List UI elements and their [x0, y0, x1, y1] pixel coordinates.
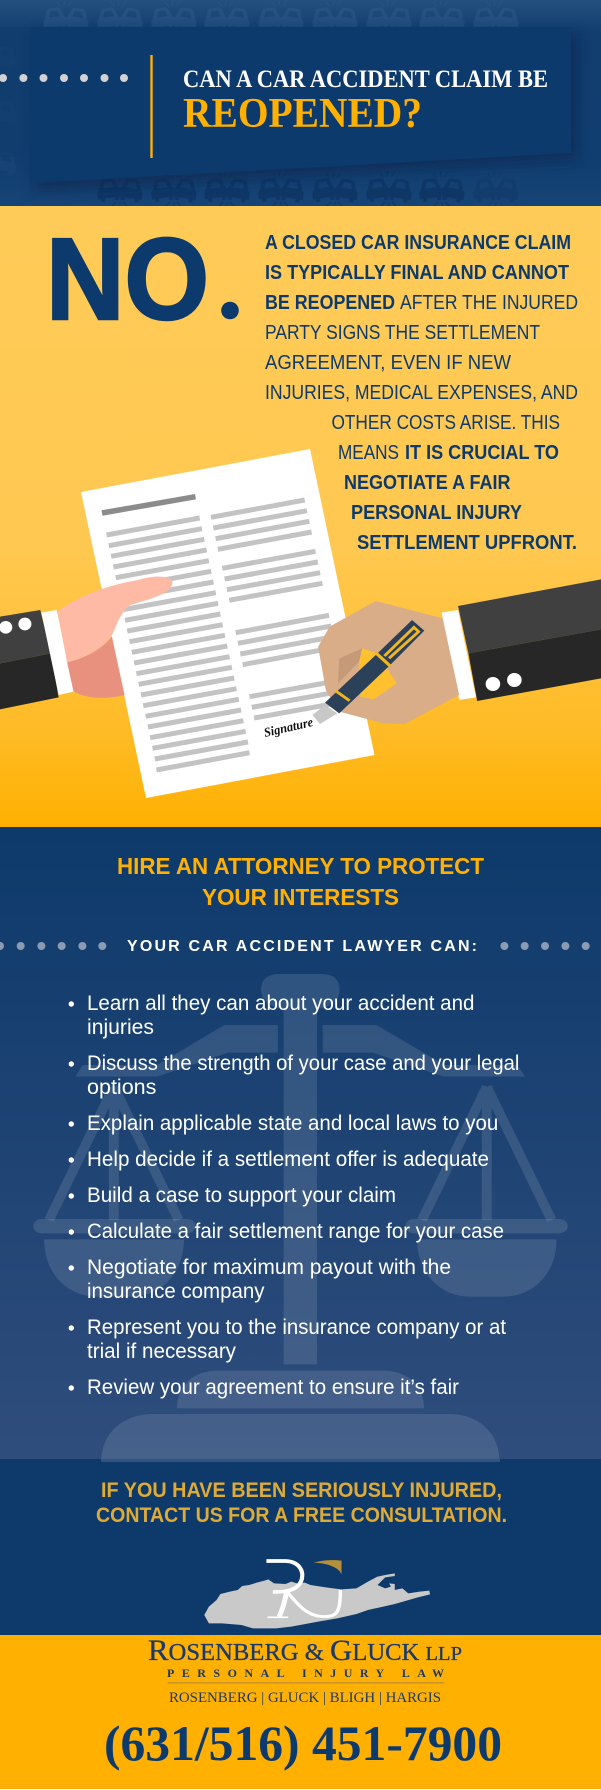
- title: CAN A CAR ACCIDENT CLAIM BE: [183, 66, 548, 93]
- answer paragraph: MEANS: [338, 442, 399, 464]
- answer paragraph: [265, 232, 578, 554]
- tagline: PERSONAL INJURY LAW: [167, 1666, 444, 1680]
- NO heading: NO: [46, 214, 209, 344]
- left hand and sleeve: [0, 577, 172, 709]
- item: review: Review your agreement to ensure it’s fair: [87, 1376, 459, 1399]
- dotted line right: [500, 942, 590, 950]
- item: explain: Explain applicable state and local laws to you: [87, 1112, 498, 1135]
- item: learn: [69, 992, 474, 1039]
- answer paragraph: PARTY SIGNS THE SETTLEMENT: [265, 322, 540, 344]
- subheading: YOUR CAR ACCIDENT LAWYER CAN:: [127, 938, 477, 955]
- answer paragraph: AFTER THE INJURED: [400, 292, 578, 314]
- answer paragraph: PERSONAL INJURY: [351, 502, 523, 524]
- item: learn: Learn all they can about your accident and: [87, 992, 474, 1015]
- orange divider: [150, 55, 153, 158]
- section heading: YOUR INTERESTS: [202, 884, 399, 910]
- call to action text: IF YOU HAVE BEEN SERIOUSLY INJURED,: [101, 1479, 502, 1502]
- bullet list: [69, 992, 519, 1399]
- phone number: (631/516) 451-7900: [104, 1715, 502, 1771]
- title: REOPENED?: [183, 91, 422, 137]
- item: discuss: Discuss the strength of your case and your legal: [87, 1052, 519, 1075]
- call to action text: [96, 1479, 507, 1527]
- item: negotiate: Negotiate for maximum payout with the: [87, 1256, 451, 1279]
- item: represent: [69, 1316, 506, 1363]
- call to action text: CONTACT US FOR A FREE CONSULTATION.: [96, 1504, 507, 1527]
- answer paragraph: SETTLEMENT UPFRONT.: [357, 532, 577, 554]
- car pattern top row: [41, 0, 521, 37]
- section heading: [117, 853, 484, 910]
- title: [183, 66, 548, 137]
- title panel: [30, 27, 571, 183]
- gold rule: [168, 1682, 444, 1684]
- answer paragraph: IS TYPICALLY FINAL AND CANNOT: [265, 262, 569, 284]
- answer paragraph: IT IS CRUCIAL TO: [405, 442, 559, 464]
- logo: Long Island map with RG monogram: [204, 1560, 430, 1628]
- partner names: ROSENBERG | GLUCK | BLIGH | HARGIS: [169, 1690, 441, 1706]
- item: negotiate: [69, 1256, 451, 1303]
- panel: hire an attorney: [0, 827, 601, 1462]
- item: discuss: [69, 1052, 519, 1099]
- answer paragraph: OTHER COSTS ARISE. THIS: [332, 412, 560, 434]
- answer paragraph: AGREEMENT, EVEN IF NEW: [265, 352, 511, 374]
- item: help: Help decide if a settlement offer is adequate: [87, 1148, 489, 1171]
- dotted line: [0, 74, 128, 82]
- answer paragraph: BE REOPENED: [265, 292, 395, 314]
- item: build: Build a case to support your claim: [87, 1184, 396, 1207]
- panel: firm footer: [0, 1634, 601, 1790]
- scales of justice watermark: [33, 974, 568, 1462]
- panel: answer: [0, 206, 601, 827]
- item: discuss: options: [87, 1076, 156, 1099]
- illustration: signing a document: [0, 449, 601, 798]
- item: calculate: Calculate a fair settlement range for your case: [87, 1220, 504, 1243]
- item: learn: injuries: [87, 1016, 154, 1039]
- car pattern left column: [0, 39, 19, 181]
- title panel shadow: [34, 32, 578, 192]
- panel: call to action: [0, 1459, 601, 1635]
- answer paragraph: A CLOSED CAR INSURANCE CLAIM: [265, 232, 571, 254]
- firm name: ROSENBERG & GLUCK LLP: [148, 1634, 462, 1667]
- signature: Signature: [262, 714, 315, 740]
- section heading: HIRE AN ATTORNEY TO PROTECT: [117, 853, 484, 879]
- item: negotiate: insurance company: [87, 1280, 265, 1303]
- item: represent: trial if necessary: [87, 1340, 236, 1363]
- answer paragraph: NEGOTIATE A FAIR: [344, 472, 511, 494]
- panel: header: [0, 0, 601, 208]
- item: represent: Represent you to the insurance company or at: [87, 1316, 506, 1339]
- settlement document: [81, 449, 374, 798]
- car pattern bottom row: [95, 171, 521, 208]
- right hand, pen and sleeve: [312, 579, 601, 724]
- dotted line left: [0, 942, 106, 950]
